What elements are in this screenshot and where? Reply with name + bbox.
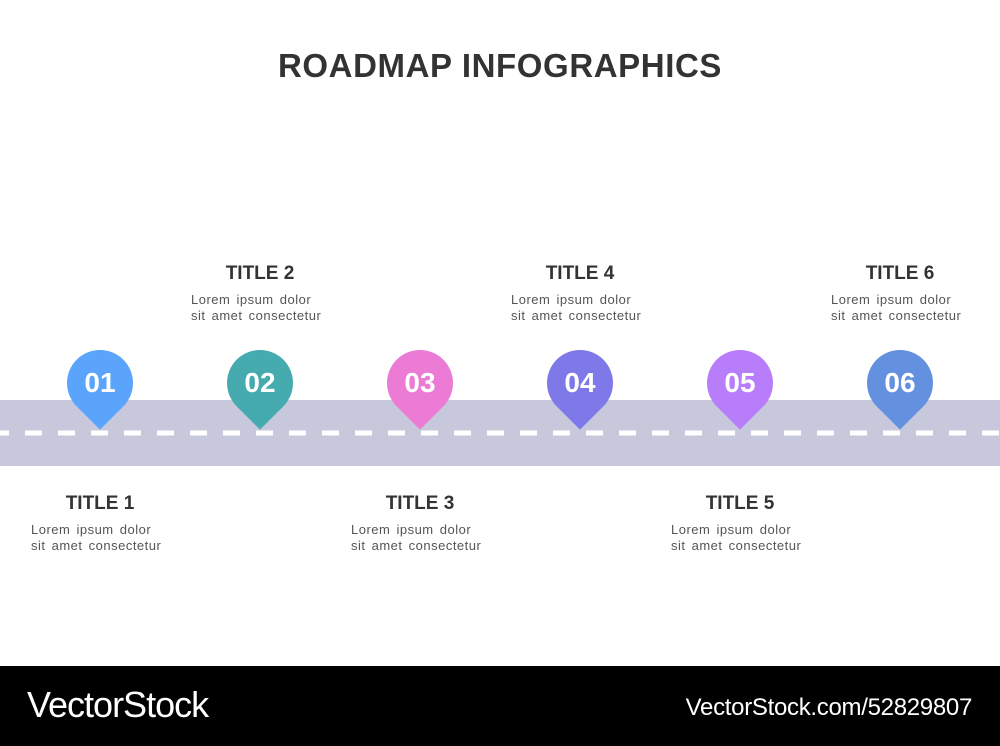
text 6: Lorem ipsum dolor [831, 292, 951, 307]
text 4: Lorem ipsum dolor [511, 292, 631, 307]
text 5: Lorem ipsum dolor [671, 522, 791, 537]
text 4 [511, 263, 641, 323]
road [0, 400, 1000, 466]
text 2: TITLE 2 [226, 263, 294, 284]
text 4: sit amet consectetur [511, 308, 641, 323]
pin 03 [387, 350, 453, 430]
pin 06 [867, 350, 933, 430]
pin 05 [707, 350, 773, 430]
footer: VectorStock [27, 684, 208, 725]
text 3: Lorem ipsum dolor [351, 522, 471, 537]
pin 05: 05 [724, 367, 756, 398]
text 2: Lorem ipsum dolor [191, 292, 311, 307]
text 5: sit amet consectetur [671, 538, 801, 553]
text 2: sit amet consectetur [191, 308, 321, 323]
text 1: TITLE 1 [66, 493, 134, 514]
text 2 [191, 263, 321, 323]
pin 06: 06 [884, 367, 916, 398]
text 6 [831, 263, 961, 323]
pin 04 [547, 350, 613, 430]
pin 03: 03 [404, 367, 436, 398]
text 5 [671, 493, 801, 553]
pin 02: 02 [244, 367, 276, 398]
pin 01 [67, 350, 133, 430]
text 5: TITLE 5 [706, 493, 774, 514]
text 1 [31, 493, 161, 553]
text 1: Lorem ipsum dolor [31, 522, 151, 537]
pin 01: 01 [84, 367, 116, 398]
text 1: sit amet consectetur [31, 538, 161, 553]
text 6: sit amet consectetur [831, 308, 961, 323]
text 6: TITLE 6 [866, 263, 934, 284]
text 3: TITLE 3 [386, 493, 454, 514]
pin 02 [227, 350, 293, 430]
text 4: TITLE 4 [546, 263, 614, 284]
pin 04: 04 [564, 367, 596, 398]
title: ROADMAP INFOGRAPHICS [278, 47, 722, 84]
footer: VectorStock.com/52829807 [686, 694, 972, 721]
text 3 [351, 493, 481, 553]
text 3: sit amet consectetur [351, 538, 481, 553]
footer [0, 666, 1000, 746]
